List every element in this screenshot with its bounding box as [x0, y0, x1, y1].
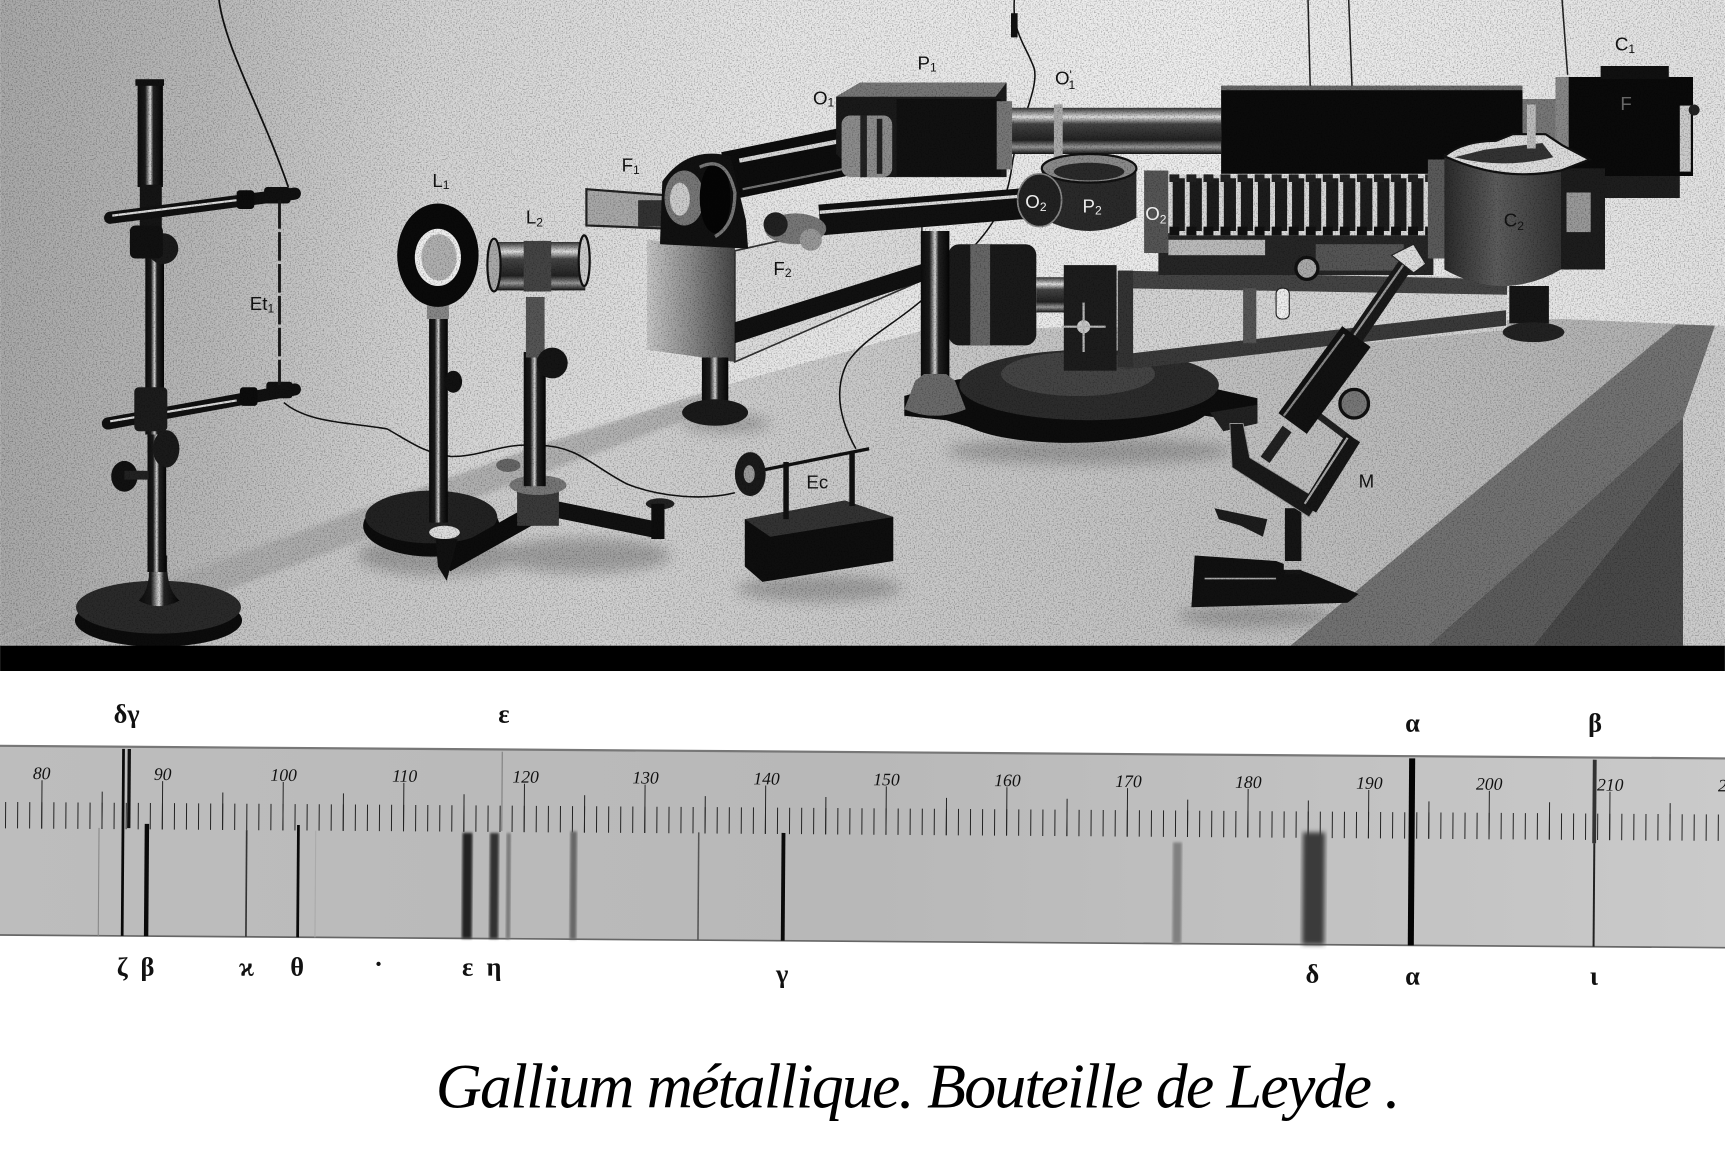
lower line letters: β	[141, 952, 154, 982]
wire from spark gap up to upper apparatus	[840, 0, 1035, 449]
label: F2: 2	[785, 266, 792, 280]
cast shadows on the table	[358, 415, 1331, 627]
lower line letters: ι	[1590, 961, 1599, 991]
wire from electrodes to spark gap	[284, 403, 735, 497]
label: O'1: O	[1055, 68, 1070, 89]
stand with electrodes Et	[75, 0, 295, 647]
grain overlay	[0, 0, 1725, 646]
lower line letters	[117, 948, 1599, 991]
strip background	[0, 746, 1725, 948]
spark gap Ec on battery box	[735, 0, 1035, 582]
scale numbers: 200	[1476, 774, 1503, 794]
lower line letters: θ	[290, 952, 304, 982]
title caption: Gallium métallique. Bouteille de Leyde .	[436, 1051, 1400, 1122]
scale numbers	[33, 763, 1725, 795]
optical bench frame	[1118, 271, 1507, 370]
scale numbers: 150	[873, 769, 900, 789]
label: Et1: 1	[267, 301, 274, 315]
label: Et1: Et	[250, 293, 267, 314]
label: L1: 1	[443, 178, 450, 192]
upper line letters: α	[1405, 708, 1420, 738]
lower line letters: ε	[462, 952, 473, 982]
rotating table	[904, 265, 1257, 443]
lower line letters: γ	[775, 958, 788, 988]
lower line letters: α	[1405, 961, 1420, 991]
label: Ec: Ec	[806, 471, 828, 492]
lower line letters: ϰ	[239, 952, 254, 982]
panel: photograph of the spectroscope apparatus	[0, 0, 1725, 647]
label: O2: O	[1025, 191, 1040, 212]
label: O2: 2	[1040, 200, 1047, 214]
label: O'1: '	[1070, 68, 1072, 82]
label: C2: C	[1504, 210, 1517, 231]
label: P1: 1	[930, 61, 937, 75]
scale numbers: 190	[1356, 773, 1383, 793]
first collimator with slit F1	[586, 139, 922, 426]
rail with windows below bellows	[1158, 233, 1433, 279]
label: L2: L	[526, 206, 536, 227]
scale numbers: 180	[1235, 772, 1262, 792]
spectral lines	[98, 749, 1597, 947]
scale numbers: 110	[392, 766, 417, 786]
prism drum P2	[1018, 154, 1136, 231]
large box and plate holder C1	[1221, 66, 1700, 198]
lens L1	[363, 204, 499, 557]
panel: spectrum plate	[0, 699, 1725, 991]
upper line letters: δγ	[114, 699, 140, 729]
label: P2: 2	[1095, 204, 1102, 218]
label: O1: O	[813, 88, 828, 109]
label: F on plate holder: F	[1620, 93, 1632, 114]
label: C2: 2	[1517, 219, 1524, 233]
label: F1: 1	[633, 163, 640, 177]
scale numbers: 120	[512, 767, 539, 787]
bellows	[1144, 171, 1428, 253]
label: F2: F	[773, 258, 785, 279]
lower line letters: δ	[1306, 958, 1319, 988]
wire to the upper electrode	[219, 0, 288, 187]
label: P2: P	[1083, 195, 1095, 216]
label: O1: 1	[828, 96, 835, 110]
table	[0, 319, 1725, 646]
upper line letters: β	[1588, 708, 1602, 738]
upper line letters: ε	[498, 699, 510, 729]
lens L2 on tripod	[429, 235, 674, 581]
scale numbers: 80	[33, 763, 51, 783]
lower line letters: ζ	[117, 952, 129, 982]
hanging wires at top right	[1308, 0, 1568, 86]
lower line letters: η	[486, 952, 501, 982]
black divider band	[0, 646, 1725, 671]
upper line letters	[114, 699, 1602, 738]
label: C1: 1	[1628, 42, 1635, 56]
scale numbers: 140	[753, 768, 780, 789]
label: F1: F	[622, 155, 633, 176]
scale numbers: 210	[1597, 775, 1624, 795]
label: L1: L	[432, 170, 443, 191]
camera cylinder C2 with foot	[1428, 105, 1605, 342]
microscope M	[1191, 244, 1426, 607]
scale numbers: 170	[1115, 771, 1142, 791]
spectrum strip, slightly tilted	[0, 746, 1725, 948]
label: M: M	[1359, 470, 1374, 491]
label: O'1: 1	[1069, 78, 1076, 92]
scale numbers: 130	[632, 767, 659, 788]
scale numbers: 100	[270, 765, 297, 785]
label: O'2: O	[1145, 203, 1160, 224]
scale ticks	[5, 804, 1724, 828]
wall background	[0, 0, 1725, 646]
second tube with support, drum	[763, 194, 1075, 380]
label: L2: 2	[536, 216, 543, 230]
label: P1: P	[918, 52, 930, 73]
label: C1: C	[1615, 34, 1628, 55]
scale numbers: 160	[994, 770, 1021, 790]
prism box P1 and tube O'1	[836, 83, 1221, 177]
lower line letters: ·	[374, 948, 383, 978]
scale numbers: 90	[154, 764, 172, 784]
label: O'2: 2	[1160, 212, 1167, 226]
